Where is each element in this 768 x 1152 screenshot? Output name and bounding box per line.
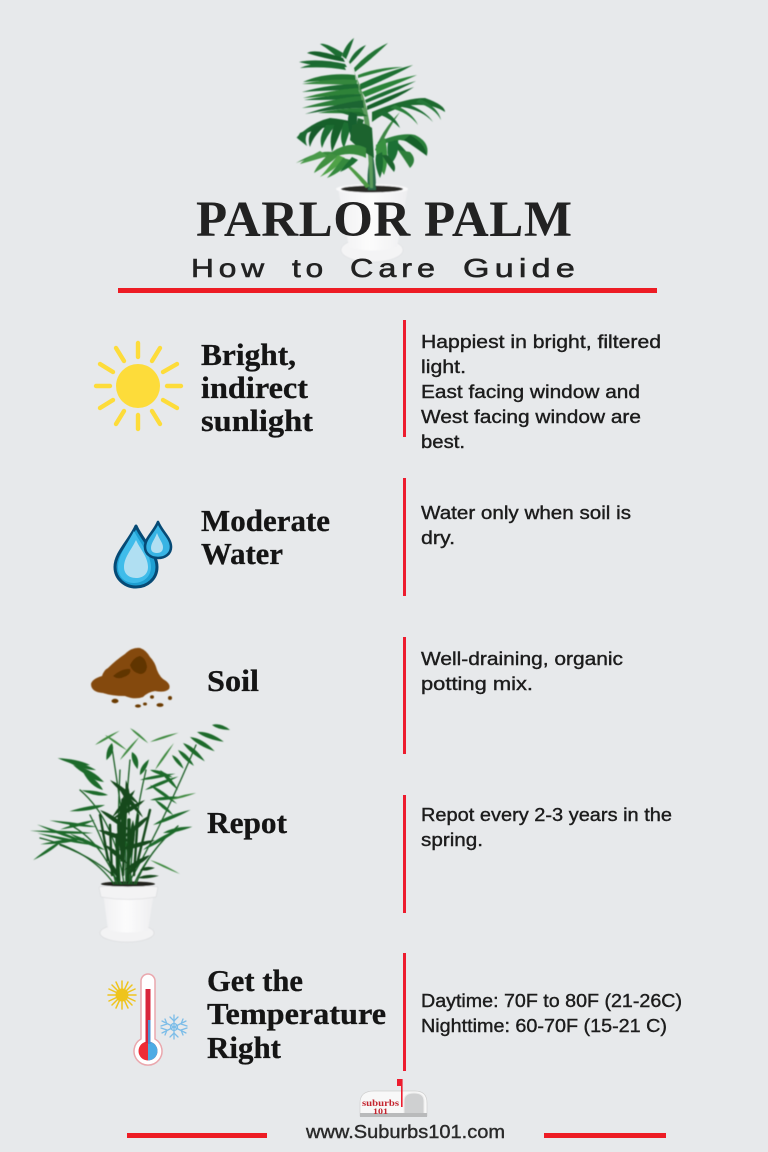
row dividers bbox=[403, 320, 406, 1071]
subtitle: Care bbox=[350, 253, 440, 283]
pot bbox=[336, 184, 408, 262]
snowflake bbox=[161, 1015, 187, 1039]
heading: bright indirect sunlight: Bright, bbox=[201, 337, 296, 372]
text: temperature description bbox=[421, 991, 682, 1036]
heading: bright indirect sunlight bbox=[201, 337, 314, 438]
footer line left bbox=[127, 1133, 267, 1138]
thermometer bbox=[134, 974, 162, 1065]
sun bbox=[108, 981, 136, 1009]
logo: suburbs101 mailbox: 101 bbox=[373, 1107, 388, 1116]
text: soil description: Well-draining, organic bbox=[421, 649, 623, 669]
text: temperature description: Daytime: 70F to 80F (21-26C) bbox=[421, 991, 682, 1011]
heading: bright indirect sunlight: indirect bbox=[201, 370, 309, 405]
palm fronds bbox=[296, 38, 445, 190]
text: light description: Happiest in bright, filtered bbox=[421, 332, 661, 352]
title: PARLOR PALM bbox=[196, 192, 572, 248]
text: light description: light. bbox=[421, 357, 466, 377]
heading: moderate water: Moderate bbox=[201, 503, 330, 538]
subtitle: Guide bbox=[463, 253, 580, 283]
icon: soil pile bbox=[91, 648, 172, 708]
heading: get the temperature right: Right bbox=[207, 1030, 282, 1065]
heading: moderate water: Water bbox=[201, 536, 283, 571]
icon: sun bbox=[96, 343, 181, 429]
subtitle: How bbox=[191, 253, 269, 283]
heading: soil: Soil bbox=[207, 663, 259, 698]
subtitle: to bbox=[292, 253, 328, 283]
text: soil description bbox=[421, 649, 623, 694]
heading: get the temperature right: Get the bbox=[207, 963, 303, 998]
heading: get the temperature right: Temperature bbox=[207, 996, 386, 1031]
text: light description bbox=[421, 332, 661, 452]
logo: suburbs101 mailbox bbox=[360, 1079, 427, 1117]
white pot with saucer bbox=[99, 881, 158, 942]
title underline bbox=[118, 288, 657, 293]
text: repot description: Repot every 2-3 years in the bbox=[421, 805, 672, 825]
text: light description: West facing window are bbox=[421, 407, 641, 427]
leaflets bbox=[30, 723, 231, 862]
text: water description: dry. bbox=[421, 528, 455, 548]
text: soil description: potting mix. bbox=[421, 674, 533, 694]
logo: suburbs101 mailbox: suburbs bbox=[362, 1099, 399, 1109]
heading: get the temperature right bbox=[207, 963, 386, 1065]
text: repot description bbox=[421, 805, 672, 850]
subtitle bbox=[191, 253, 580, 283]
text: repot description: spring. bbox=[421, 830, 483, 850]
icon: water drops bbox=[115, 522, 171, 587]
text: light description: best. bbox=[421, 432, 465, 452]
heading: moderate water bbox=[201, 503, 330, 571]
footer line right bbox=[544, 1133, 666, 1138]
footer url: www.Suburbs101.com bbox=[305, 1122, 505, 1142]
text: water description: Water only when soil is bbox=[421, 503, 631, 523]
icon: thermometer with sun and snowflake bbox=[108, 974, 187, 1065]
text: light description: East facing window and bbox=[421, 382, 640, 402]
stems bbox=[40, 745, 196, 884]
second plant: bushy palm in white pot bbox=[30, 723, 231, 942]
hero plant: parlor palm in white pot bbox=[296, 38, 445, 262]
text: water description bbox=[421, 503, 631, 548]
heading: bright indirect sunlight: sunlight bbox=[201, 403, 314, 438]
heading: repot: Repot bbox=[207, 805, 288, 840]
text: temperature description: Nighttime: 60-70F (15-21 C) bbox=[421, 1016, 667, 1036]
